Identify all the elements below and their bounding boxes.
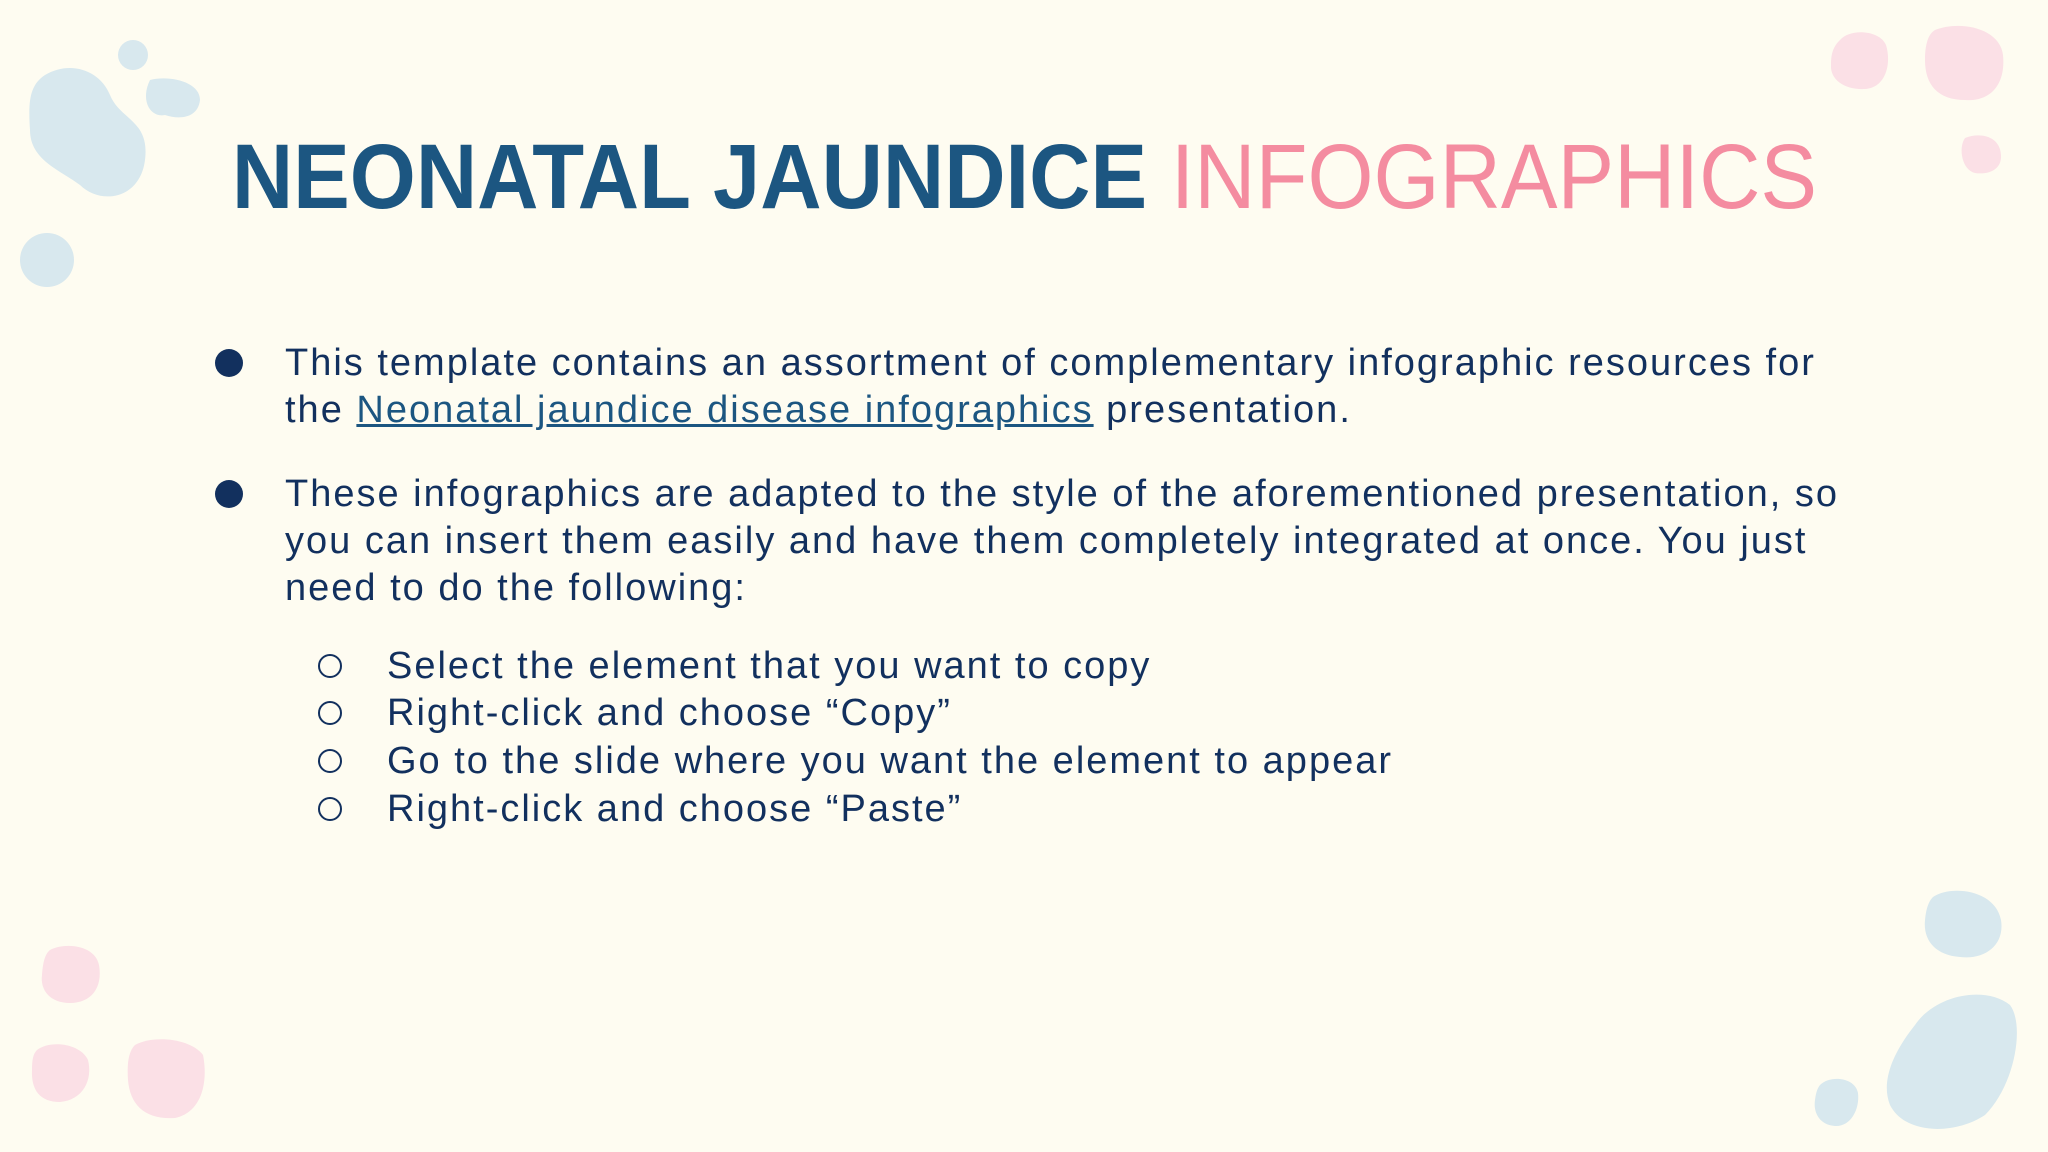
decorative blobs top left	[20, 40, 200, 287]
sub-steps list: Select the element that you want to copy	[387, 645, 1151, 687]
bullet 2: These infographics are adapted to the style of the aforementioned presentation, so	[285, 473, 1839, 515]
decorative blobs bottom right	[1814, 890, 2017, 1129]
bullet 2	[215, 473, 1839, 609]
bullet 1: This template contains an assortment of complementary infographic resources for	[285, 342, 1816, 384]
decorative blobs top right	[1831, 26, 2004, 174]
sub-steps list: Right-click and choose “Copy”	[387, 692, 952, 734]
bullet 2: need to do the following:	[285, 567, 747, 609]
sub-steps list: Right-click and choose “Paste”	[387, 788, 962, 830]
sub-steps list	[318, 645, 1393, 830]
bullet 1	[215, 342, 1816, 431]
title: NEONATAL JAUNDICE INFOGRAPHICS	[232, 126, 1817, 228]
decorative blobs bottom left	[32, 946, 205, 1118]
bullet 1: the Neonatal jaundice disease infographics presentation.	[285, 389, 1352, 431]
sub-steps list: Go to the slide where you want the element to appear	[387, 740, 1393, 782]
bullet 2: you can insert them easily and have them completely integrated at once. You just	[285, 520, 1808, 562]
